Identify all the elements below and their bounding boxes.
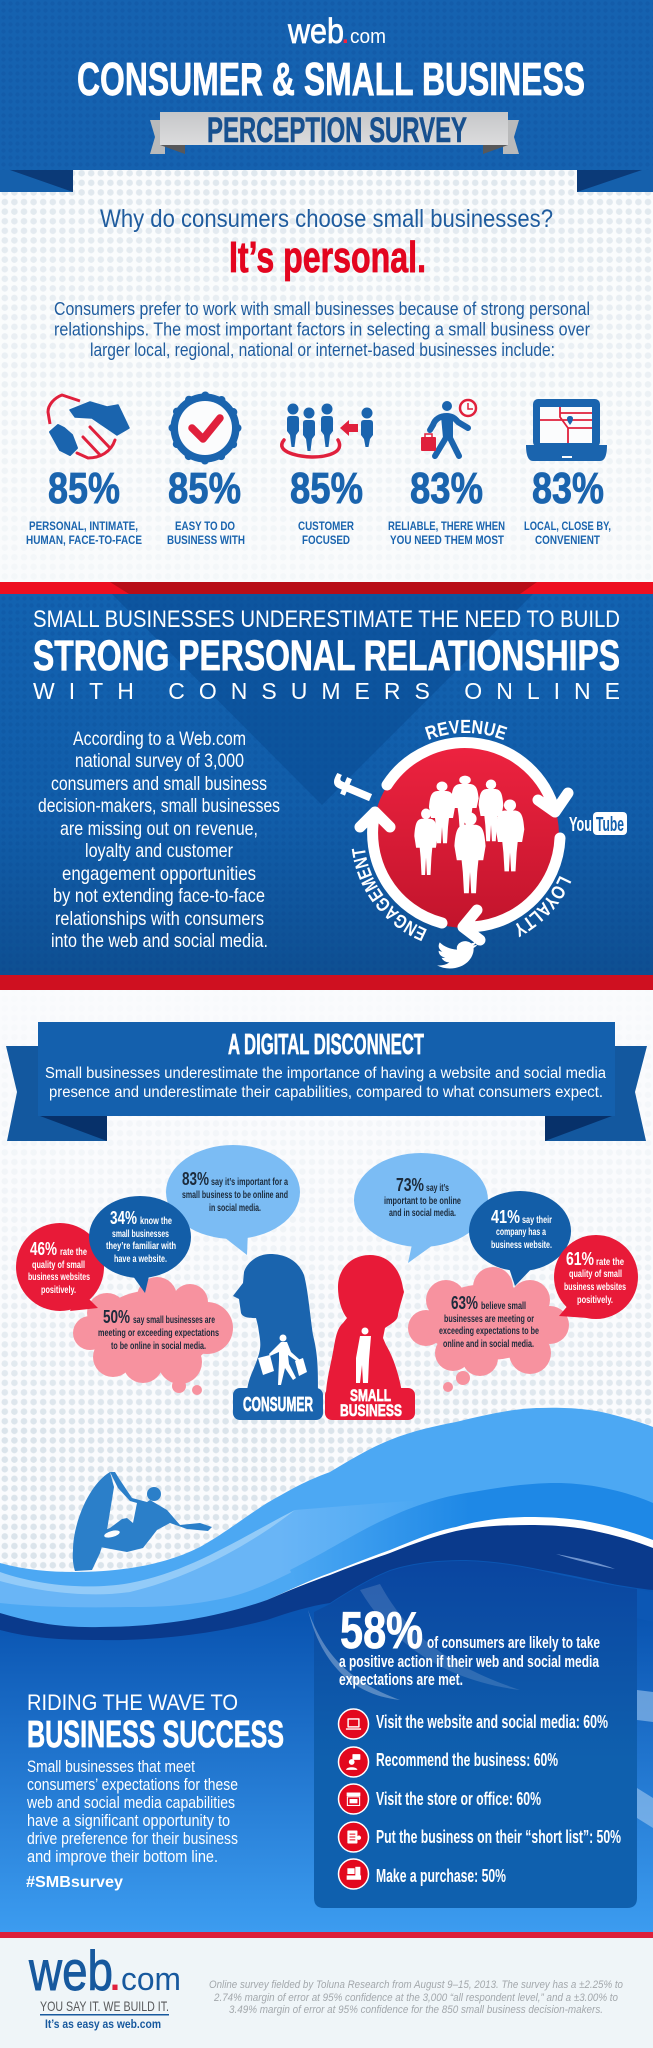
heading line 3: WITH CONSUMERS ONLINE — [33, 678, 620, 704]
icon: check badge — [170, 394, 240, 462]
icon: youtube: Tube — [596, 814, 624, 836]
stat: 83% local: CONVENIENT — [535, 533, 601, 547]
diagram: customer relationship cycle — [320, 720, 627, 968]
bubble: 61% red: positively. — [577, 1295, 613, 1306]
survey paragraph: by not extending face-to-face — [53, 885, 265, 907]
bubble: 41% dark blue: business website. — [491, 1240, 552, 1251]
bubble: 50% pink cloud: to be online in social media. — [111, 1341, 206, 1352]
bubble: 50% pink cloud: meeting or exceeding expectations — [98, 1328, 219, 1339]
footer logo: com — [121, 1961, 181, 1997]
stat: 85% easy — [167, 464, 245, 547]
survey paragraph: relationships with consumers — [55, 908, 264, 930]
icon: laptop with map — [526, 399, 607, 461]
paragraph: have a significant opportunity to — [27, 1811, 230, 1830]
bubble: 83% light blue: in social media. — [209, 1203, 261, 1214]
survey paragraph: decision-makers, small businesses — [38, 795, 280, 817]
survey paragraph: engagement opportunities — [62, 863, 256, 885]
icon: youtube — [569, 812, 627, 836]
loyalty arrow — [463, 838, 560, 940]
logo: web.com — [287, 12, 386, 51]
shopper figure — [258, 1334, 307, 1385]
icon: customer focused — [282, 404, 373, 457]
hashtag: #SMBsurvey — [26, 1874, 123, 1891]
logo: web.com: com — [350, 26, 386, 48]
bubble: 46% red — [16, 1223, 104, 1311]
top red band — [0, 582, 653, 594]
bubble: 83% light blue — [166, 1145, 300, 1255]
action: recommend: Recommend the business: 60% — [376, 1750, 558, 1770]
bubble: 83% light blue: 83% — [182, 1169, 209, 1189]
paragraph: consumers’ expectations for these — [27, 1775, 238, 1794]
bubble: 73% light blue: important to be online — [384, 1196, 461, 1207]
icon: youtube: You — [569, 814, 592, 836]
panel: personal relationships — [0, 582, 653, 990]
action: recommend — [338, 1747, 558, 1777]
stat: 85% personal: HUMAN, FACE-TO-FACE — [26, 533, 142, 547]
stat: 85% customer focused: 85% — [290, 464, 363, 513]
stat text — [339, 1633, 600, 1689]
bubble: 63% pink cloud: businesses are meeting or — [444, 1314, 534, 1325]
action: short list — [338, 1822, 621, 1852]
icon: facebook: f — [320, 769, 385, 811]
disclaimer — [209, 1979, 623, 2016]
bubble: 61% red — [554, 1235, 638, 1319]
banner heading: A DIGITAL DISCONNECT — [228, 1029, 424, 1061]
stat: 85% easy: BUSINESS WITH — [167, 533, 245, 547]
stat: 85% personal: 85% — [48, 464, 120, 513]
stat text: expectations are met. — [339, 1670, 463, 1689]
bubble: 73% light blue: say it’s — [426, 1183, 449, 1194]
stat: 83% local — [524, 464, 611, 547]
bubble: 34% dark blue: 34% — [110, 1208, 137, 1228]
engagement arrow — [360, 812, 442, 923]
bottom red band — [0, 975, 653, 990]
footer logo: web — [28, 1939, 113, 2002]
icon: walking man with clock and suitcase — [421, 400, 476, 456]
question heading: Why do consumers choose small businesses? — [100, 205, 553, 233]
bubble: 73% light blue: 73% — [396, 1175, 424, 1195]
intro paragraph: Consumers prefer to work with small businesses because of strong personal — [54, 299, 590, 319]
stat: 85% customer focused — [290, 464, 363, 547]
small business label: BUSINESS — [340, 1401, 402, 1420]
bubble: 50% pink cloud: say small businesses are — [133, 1315, 215, 1326]
silhouette: small business — [325, 1255, 415, 1420]
action: visit website — [338, 1709, 608, 1739]
stat: 85% personal: PERSONAL, INTIMATE, — [29, 519, 138, 533]
banner text — [45, 1065, 606, 1101]
stat: 85% customer focused: FOCUSED — [302, 533, 350, 547]
panel: why consumers choose small businesses — [0, 170, 653, 582]
action: make a purchase: Make a purchase: 50% — [376, 1866, 506, 1886]
bubble: 41% dark blue: say their — [522, 1215, 552, 1226]
bubble: 34% dark blue: they’re familiar with — [106, 1241, 176, 1252]
panel: 58% of consumers — [308, 1561, 637, 1908]
paragraph: Small businesses that meet — [27, 1757, 195, 1776]
bubble: 34% dark blue: know the — [140, 1216, 172, 1227]
paragraph: web and social media capabilities — [26, 1793, 235, 1812]
footer logo: . — [110, 1957, 120, 1998]
bubble: 50% pink cloud: 50% — [103, 1307, 130, 1327]
header banner — [0, 0, 653, 192]
survey paragraph: into the web and social media. — [51, 930, 268, 952]
intro paragraph: relationships. The most important factors in selecting a small business over — [54, 320, 590, 340]
footer logo: YOU SAY IT. WE BUILD IT. — [40, 1998, 169, 2014]
ribbon: perception survey — [150, 111, 519, 154]
stat: 83% local: 83% — [532, 464, 604, 513]
bubble: 46% red: positively. — [41, 1285, 76, 1296]
consumer label: CONSUMER — [243, 1394, 313, 1416]
stat: 83% reliable: 83% — [410, 464, 483, 513]
footer logo — [28, 1939, 181, 2031]
right side light streaks — [637, 1690, 653, 1828]
small business bubbles — [354, 1153, 638, 1392]
revenue arrow — [387, 743, 568, 812]
businessman figure — [356, 1328, 371, 1383]
stat: 85% customer focused: CUSTOMER — [298, 519, 354, 533]
bubble: 73% light blue: and in social media. — [389, 1208, 456, 1219]
dotted background: digital disconnect — [0, 990, 653, 1640]
panel: riding the wave — [0, 1560, 653, 1932]
disclaimer: 2.74% margin of error at 95% confidence at the 3,000 “all respondent level,” and a ±3.00% to — [213, 1992, 618, 2004]
headline: It's personal: It’s personal. — [229, 233, 426, 282]
survey paragraph — [38, 728, 280, 952]
small business label — [325, 1386, 415, 1420]
stat: 83% reliable: YOU NEED THEM MOST — [390, 533, 505, 547]
logo: web.com: . — [342, 22, 349, 49]
heading: business success: BUSINESS SUCCESS — [27, 1714, 284, 1756]
stat: 83% reliable: RELIABLE, THERE WHEN — [388, 519, 505, 533]
bubble: 61% red: 61% — [566, 1249, 594, 1269]
stat: 58%: 58% — [340, 1602, 423, 1660]
bubble: 34% dark blue: small businesses — [112, 1229, 169, 1240]
bubble: 46% red: 46% — [30, 1239, 57, 1259]
footer — [0, 1932, 653, 2048]
bubble: 50% pink cloud — [73, 1277, 233, 1395]
banner text: presence and underestimate their capabilities, compared to what consumers expect. — [49, 1084, 603, 1101]
banner: a digital disconnect — [6, 1022, 647, 1141]
bubble: 63% pink cloud — [408, 1267, 569, 1392]
label: loyalty: LOYALTY — [516, 876, 572, 938]
survey paragraph: are missing out on revenue, — [60, 818, 258, 840]
paragraph: and improve their bottom line. — [27, 1847, 218, 1866]
logo: web.com: web — [287, 12, 344, 51]
small business label: SMALL — [350, 1386, 391, 1405]
wave — [0, 1408, 653, 1660]
intro paragraph — [54, 299, 590, 360]
icon: surfer — [73, 1472, 212, 1571]
stat: 85% easy: 85% — [168, 464, 241, 513]
footer logo: It’s as easy as web.com — [45, 2017, 161, 2031]
bubble: 41% dark blue: 41% — [491, 1207, 520, 1227]
bubble: 63% pink cloud: exceeding expectations to be — [439, 1326, 539, 1337]
bubble: 34% dark blue: have a website. — [114, 1254, 167, 1265]
consumer label — [233, 1388, 323, 1420]
ribbon: perception survey: PERCEPTION SURVEY — [207, 111, 467, 150]
bubble: 61% red: quality of small — [569, 1269, 622, 1280]
action: visit store — [338, 1784, 541, 1814]
icon: twitter bird — [437, 941, 478, 968]
stat: 85% easy: EASY TO DO — [175, 519, 235, 533]
bubble: 41% dark blue: company has a — [496, 1227, 546, 1238]
bubble: 34% dark blue — [89, 1196, 191, 1293]
bubble: 83% light blue: small business to be online and — [182, 1190, 288, 1201]
disclaimer: 3.49% margin of error at 95% confidence for the 850 small business decision-makers. — [229, 2004, 603, 2016]
bubble: 41% dark blue — [469, 1191, 571, 1286]
action: make a purchase — [338, 1859, 506, 1889]
stat: 85% personal — [26, 464, 142, 547]
bubble: 63% pink cloud: online and in social media. — [443, 1339, 534, 1350]
bubble: 46% red: quality of small — [32, 1260, 85, 1271]
consumer bubbles — [16, 1145, 300, 1395]
bubble: 61% red: business websites — [564, 1282, 626, 1293]
stat: 83% reliable — [388, 464, 505, 547]
action: visit store: Visit the store or office: 60% — [376, 1789, 541, 1809]
survey paragraph: consumers and small business — [51, 773, 267, 795]
intro paragraph: larger local, regional, national or internet-based businesses include: — [90, 340, 555, 360]
survey paragraph: loyalty and customer — [85, 840, 233, 862]
paragraph — [26, 1757, 238, 1866]
bubble: 63% pink cloud: 63% — [451, 1293, 478, 1313]
bubble: 63% pink cloud: believe small — [481, 1301, 526, 1312]
paragraph: drive preference for their business — [27, 1829, 238, 1848]
bubble: 83% light blue: say it’s important for a — [211, 1177, 288, 1188]
icon: handshake — [48, 395, 129, 458]
label: revenue: REVENUE — [424, 720, 508, 740]
banner text: Small businesses underestimate the importance of having a website and social media — [45, 1065, 606, 1082]
people silhouettes — [414, 776, 524, 893]
silhouette: consumer — [233, 1254, 323, 1420]
bubble: 61% red: rate the — [596, 1257, 624, 1268]
stat: 83% local: LOCAL, CLOSE BY, — [524, 519, 611, 533]
survey paragraph: national survey of 3,000 — [75, 750, 244, 772]
label: engagement: ENGAGEMENT — [352, 848, 427, 942]
bubble: 73% light blue — [354, 1153, 488, 1263]
bubble: 46% red: business websites — [28, 1272, 90, 1283]
survey paragraph: According to a Web.com — [73, 728, 246, 750]
bubble: 46% red: rate the — [60, 1247, 87, 1258]
heading: riding the wave: RIDING THE WAVE TO — [27, 1690, 238, 1715]
